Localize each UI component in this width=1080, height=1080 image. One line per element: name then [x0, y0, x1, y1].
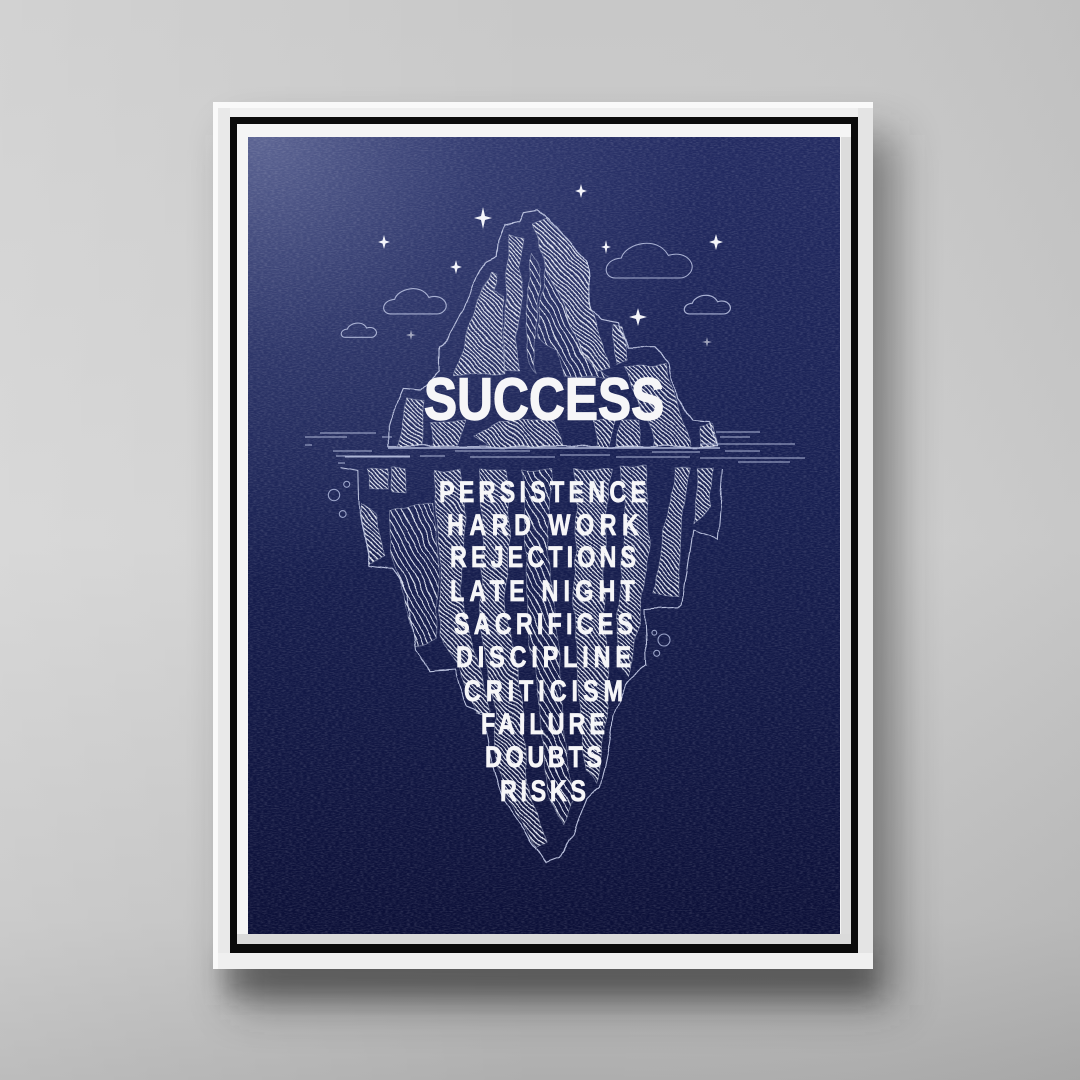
list of hidden efforts: SACRIFICES	[454, 607, 633, 641]
frame drop shadow	[225, 135, 895, 1005]
iceberg below water	[340, 467, 723, 863]
iceberg tip hatching	[398, 218, 717, 447]
title: SUCCESS: SUCCESS	[424, 366, 664, 432]
clouds	[341, 243, 730, 337]
list of hidden efforts	[439, 475, 646, 808]
list of hidden efforts: DISCIPLINE	[456, 640, 631, 674]
list of hidden efforts: PERSISTENCE	[439, 475, 646, 509]
stars	[378, 184, 723, 347]
submerged hatching	[360, 467, 713, 847]
canvas edge	[237, 124, 851, 944]
iceberg tip outline	[388, 209, 717, 447]
list of hidden efforts: CRITICISM	[464, 674, 623, 708]
list of hidden efforts: RISKS	[500, 774, 586, 808]
list of hidden efforts: HARD WORK	[447, 508, 639, 542]
bubbles	[328, 481, 670, 656]
list of hidden efforts: LATE NIGHT	[450, 574, 635, 608]
list of hidden efforts: FAILURE	[481, 707, 605, 741]
list of hidden efforts: REJECTIONS	[450, 540, 636, 574]
submerged outline	[340, 467, 723, 863]
list of hidden efforts: DOUBTS	[485, 740, 602, 774]
iceberg above water	[388, 209, 717, 447]
water surface lines	[305, 432, 805, 463]
white picture frame	[213, 102, 873, 969]
canvas poster panel	[248, 137, 840, 934]
